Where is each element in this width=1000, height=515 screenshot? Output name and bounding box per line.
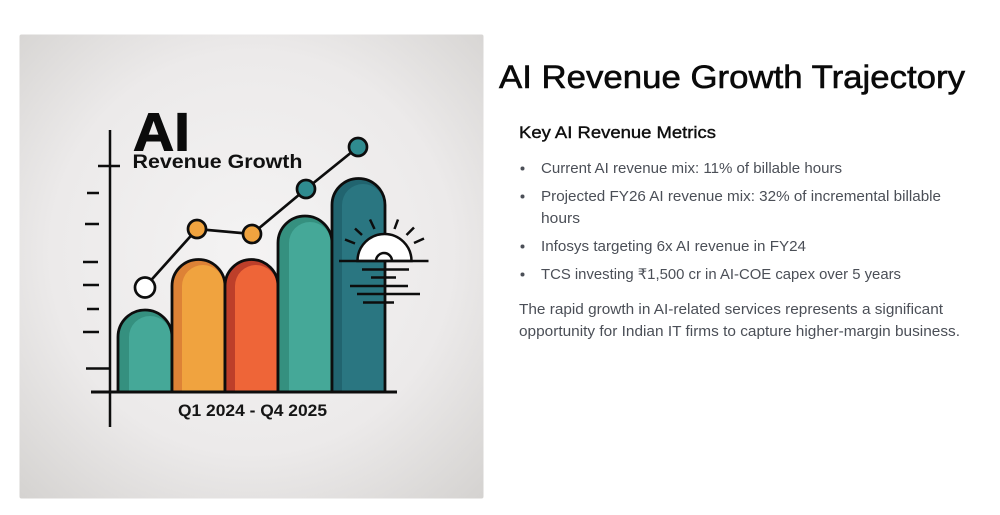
bullet 1: Current AI revenue mix: 11% of billable hours: [541, 161, 842, 177]
section heading: Key AI Revenue Metrics: [519, 123, 716, 142]
illustration subheading: Revenue Growth: [132, 151, 302, 173]
bullet 2: hours: [541, 211, 580, 227]
summary paragraph: opportunity for Indian IT firms to capture higher-margin business.: [519, 324, 960, 340]
illustration background: [20, 34, 484, 498]
title: AI Revenue Growth Trajectory: [499, 59, 966, 95]
icon: sun on horizon: [339, 220, 428, 302]
bullet 4: TCS investing ₹1,500 cr in AI-COE capex over 5 years: [541, 267, 901, 283]
bar 1: teal: [118, 310, 172, 392]
chart axes and ticks: [83, 130, 397, 427]
trend line with markers: [135, 138, 367, 298]
illustration heading: AI: AI: [133, 102, 190, 162]
axis caption: date range: Q1 2024 - Q4 2025: [178, 401, 327, 420]
bar 2: orange: [172, 260, 225, 392]
bar 3: red-orange: [225, 260, 278, 392]
summary paragraph: [519, 302, 960, 340]
summary paragraph: The rapid growth in AI-related services represents a significant: [519, 302, 943, 318]
panel: illustration: [20, 34, 484, 498]
bullet 3: Infosys targeting 6x AI revenue in FY24: [541, 239, 806, 255]
bullet list: metrics: [520, 161, 941, 283]
bullet 2: [520, 189, 941, 227]
bar 5: dark teal: [332, 179, 385, 392]
bar 4: green-teal: [278, 216, 332, 392]
bullet 2: Projected FY26 AI revenue mix: 32% of incremental billable: [541, 189, 941, 205]
